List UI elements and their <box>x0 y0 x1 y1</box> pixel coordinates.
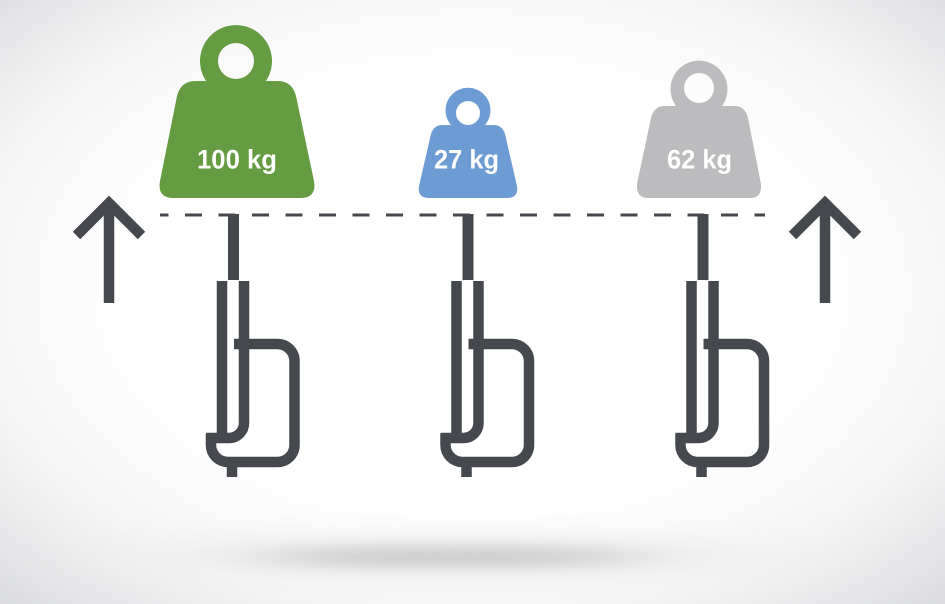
weight: 100 kg green <box>160 25 314 198</box>
mechanism 3 <box>676 214 764 477</box>
label: 100 kg: 100 kg <box>197 144 277 174</box>
floor shadow <box>110 538 790 574</box>
dashed level line <box>160 214 765 216</box>
label: 62 kg: 62 kg <box>667 144 732 174</box>
weight: 27 kg blue <box>419 88 517 198</box>
label: 27 kg: 27 kg <box>434 144 499 174</box>
weight: 62 kg grey <box>637 61 761 198</box>
mechanism 1 <box>206 214 294 477</box>
arrow: left up <box>76 203 142 303</box>
mechanism 2 <box>440 214 529 477</box>
arrow: right up <box>792 203 858 303</box>
